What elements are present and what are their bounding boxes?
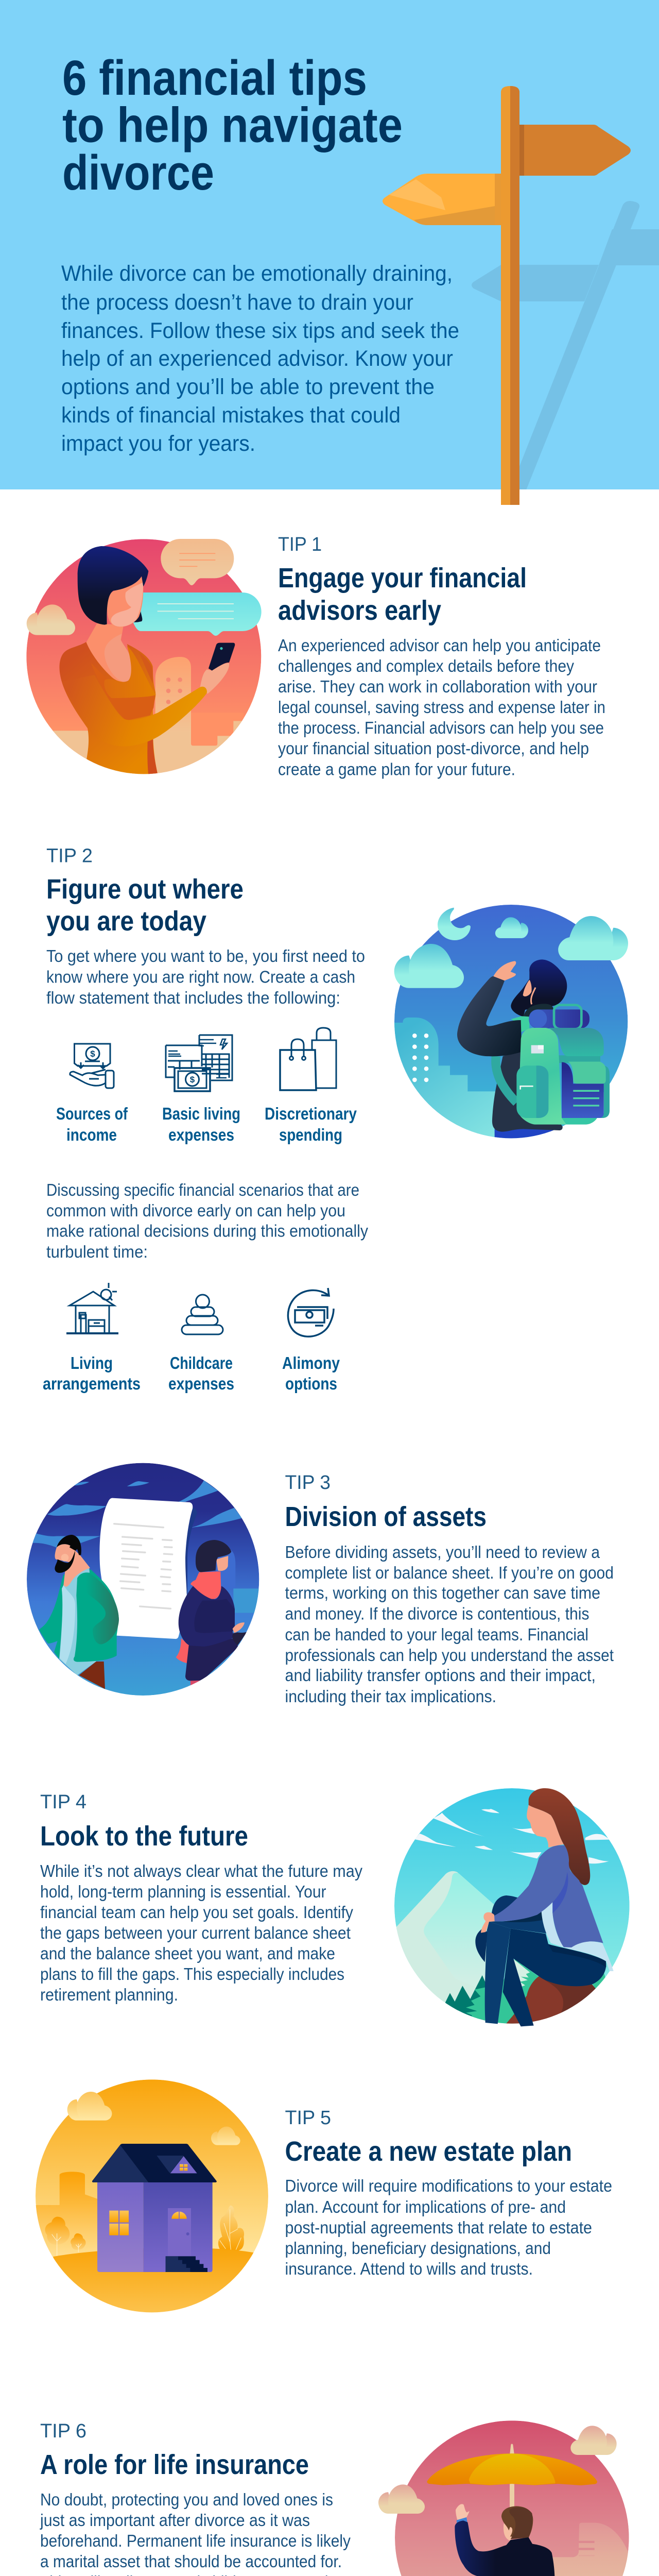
icon: basic living expenses: [166, 1035, 232, 1091]
title: 6 financial tips: [62, 50, 367, 106]
intro text: kinds of financial mistakes that could: [61, 403, 401, 428]
icon labels row 1: Sources of: [56, 1104, 128, 1123]
tip 6 text: just as important after divorce as it was: [40, 2511, 310, 2530]
icon labels row 2: Living: [71, 1353, 113, 1372]
icon labels row 1: Basic living: [162, 1104, 240, 1123]
icon dollar: $: [190, 1075, 195, 1084]
icon labels row 2: expenses: [168, 1374, 234, 1393]
tip 4 label: TIP 4: [40, 1791, 86, 1813]
tip 1 heading: [278, 563, 527, 626]
intro text: [61, 261, 459, 456]
icon labels row 2: arrangements: [43, 1374, 141, 1393]
panel: tip 4: [40, 1788, 630, 2026]
tip 4 text: While it’s not always clear what the future may: [40, 1861, 362, 1880]
tip 3 text: complete list or balance sheet. If you’re on good: [285, 1563, 614, 1582]
tip 5 heading: Create a new estate plan: [285, 2136, 572, 2167]
tip 5 text: insurance. Attend to wills and trusts.: [285, 2259, 533, 2278]
icon labels row 1: Discretionary: [265, 1104, 357, 1123]
title: divorce: [62, 145, 214, 200]
tip 2 second text: [46, 1180, 368, 1261]
intro text: impact you for years.: [61, 431, 255, 456]
tip 5 text: [285, 2176, 612, 2278]
signpost: [383, 86, 631, 505]
tip 5 text: post-nuptial agreements that relate to estate: [285, 2218, 592, 2237]
icon labels row 1: income: [66, 1125, 117, 1144]
tip 5 text: Divorce will require modifications to your estate: [285, 2176, 612, 2195]
tip 1 text: your financial situation post-divorce, and help: [278, 739, 589, 758]
intro text: finances. Follow these six tips and seek the: [61, 318, 459, 343]
title: [62, 50, 403, 200]
icon: childcare expenses: [182, 1295, 223, 1334]
tip 5 text: plan. Account for implications of pre- and: [285, 2197, 566, 2216]
tip 1 text: arise. They can work in collaboration with your: [278, 677, 597, 696]
tip 3 text: and liability transfer options and their impact,: [285, 1666, 596, 1685]
intro text: options and you’ll be able to prevent the: [61, 375, 435, 399]
tip 2 heading: Figure out where: [46, 874, 244, 905]
tip 2 text: To get where you want to be, you first need to: [46, 946, 365, 965]
panel: tip 3: [27, 1463, 614, 1706]
tip 6 text: No doubt, protecting you and loved ones is: [40, 2490, 333, 2509]
tip 3 text: professionals can help you understand the asset: [285, 1646, 614, 1665]
illustration: man with umbrella: [378, 2420, 630, 2576]
tip 1 heading: Engage your financial: [278, 563, 527, 594]
intro text: help of an experienced advisor. Know your: [61, 346, 453, 371]
tip 2 label: TIP 2: [46, 845, 93, 867]
tip 4 text: plans to fill the gaps. This especially includes: [40, 1964, 344, 1984]
tip 3 text: [285, 1543, 614, 1706]
tip 1 text: the process. Financial advisors can help you see: [278, 718, 604, 737]
intro text: While divorce can be emotionally draining,: [61, 261, 453, 286]
tip 2 heading: [46, 874, 244, 937]
tip 2 second text: make rational decisions during this emotionally: [46, 1221, 368, 1241]
tip 3 text: terms, working on this together can save time: [285, 1583, 600, 1602]
icon: sources of income: [70, 1044, 114, 1088]
panel: tip 5: [34, 2079, 612, 2317]
illustration: woman on rock: [386, 1788, 630, 2026]
tip 2 second text: Discussing specific financial scenarios that are: [46, 1180, 359, 1199]
signpost shadow: [472, 201, 659, 503]
icon labels row 1: spending: [279, 1125, 342, 1144]
illustration: couple with balance sheet: [27, 1463, 261, 1696]
tip 2 second text: turbulent time:: [46, 1242, 148, 1261]
title: to help navigate: [62, 98, 403, 152]
icon: alimony options: [288, 1288, 334, 1336]
illustration: house: [34, 2079, 268, 2317]
tip 4 heading: Look to the future: [40, 1821, 248, 1852]
tip 6 text: beforehand. Permanent life insurance is likely: [40, 2531, 351, 2550]
tip 4 text: financial team can help you set goals. Identify: [40, 1903, 353, 1922]
tip 4 text: and the balance sheet you want, and make: [40, 1944, 335, 1963]
tip 3 text: can be handed to your legal teams. Financial: [285, 1625, 588, 1644]
icon: living arrangements: [66, 1283, 118, 1333]
icon: discretionary spending: [280, 1028, 336, 1090]
tip 3 label: TIP 3: [285, 1472, 331, 1494]
tip 1 text: An experienced advisor can help you anticipate: [278, 636, 601, 655]
tip 3 heading: Division of assets: [285, 1501, 487, 1532]
panel: tip 2: [43, 845, 628, 1393]
illustration: woman with phone: [21, 539, 268, 782]
panel: tip 6: [40, 2420, 630, 2576]
tip 2 text: know where you are right now. Create a cash: [46, 968, 355, 986]
tip 1 text: create a game plan for your future.: [278, 759, 515, 779]
tip 1 label: TIP 1: [278, 534, 322, 555]
tip 2 second text: common with divorce early on can help you: [46, 1201, 345, 1220]
tip 2 text: [46, 946, 365, 1007]
tip 1 text: challenges and complex details before they: [278, 656, 574, 675]
icon labels row 1: expenses: [168, 1125, 234, 1144]
tip 6 text: [40, 2490, 351, 2576]
illustration: man with backpack: [386, 905, 628, 1140]
panel: header: [0, 0, 659, 505]
tip 4 text: retirement planning.: [40, 1985, 178, 2004]
icon dollar: $: [90, 1049, 95, 1059]
icon labels row 2: Childcare: [170, 1353, 233, 1372]
tip 5 label: TIP 5: [285, 2107, 331, 2129]
tip 3 text: Before dividing assets, you’ll need to review a: [285, 1543, 600, 1562]
tip 1 text: legal counsel, saving stress and expense later in: [278, 698, 605, 717]
tip 2 heading: you are today: [46, 906, 206, 937]
icon labels row 2: [43, 1353, 340, 1393]
tip 5 text: planning, beneficiary designations, and: [285, 2239, 551, 2258]
tip 3 text: including their tax implications.: [285, 1687, 496, 1706]
icon labels row 2: options: [285, 1374, 337, 1393]
panel: tip 1: [21, 534, 605, 782]
tip 4 text: hold, long-term planning is essential. Your: [40, 1882, 326, 1901]
tip 2 text: flow statement that includes the following:: [46, 988, 340, 1007]
icon labels row 1: [56, 1104, 357, 1144]
tip 1 text: [278, 636, 605, 779]
tip 1 heading: advisors early: [278, 595, 441, 626]
intro text: the process doesn’t have to drain your: [61, 290, 413, 315]
tip 3 text: and money. If the divorce is contentious, this: [285, 1604, 589, 1623]
icon labels row 2: Alimony: [282, 1353, 340, 1372]
tip 6 heading: A role for life insurance: [40, 2449, 309, 2480]
tip 6 label: TIP 6: [40, 2420, 86, 2442]
tip 4 text: [40, 1861, 362, 2004]
tip 4 text: the gaps between your current balance sheet: [40, 1923, 351, 1942]
tip 6 text: a marital asset that should be accounted for.: [40, 2552, 342, 2571]
